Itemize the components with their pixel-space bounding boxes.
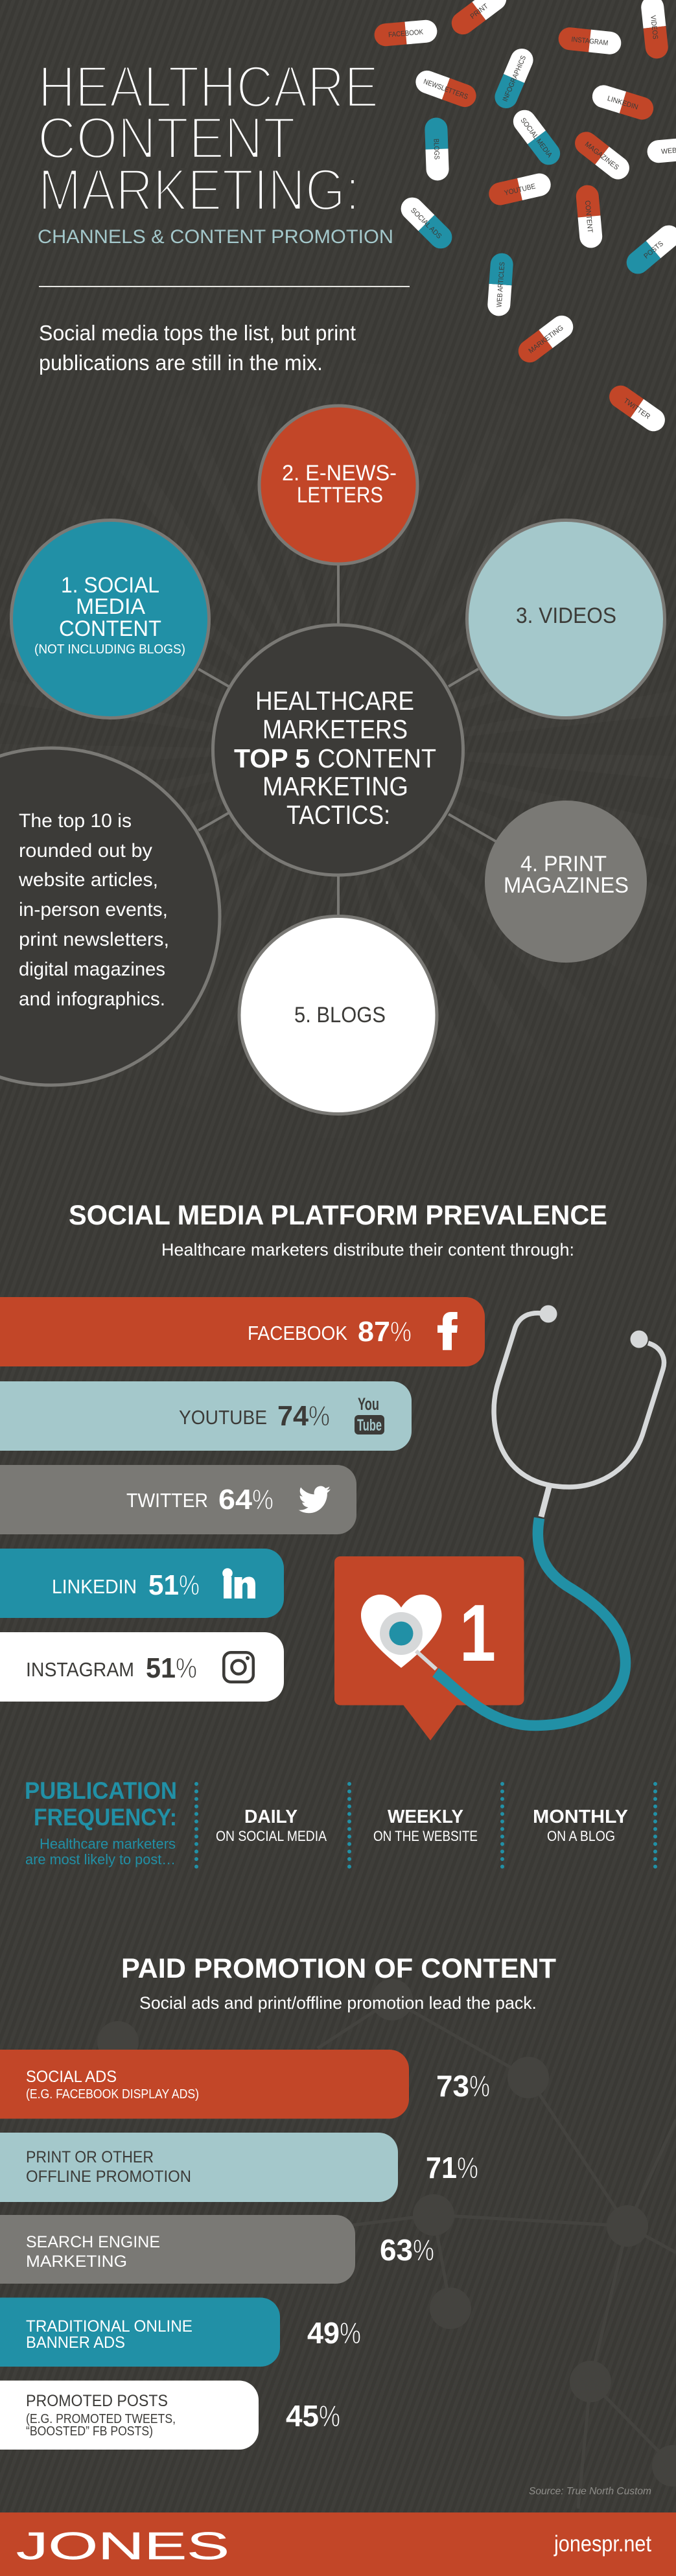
circle: e-newsletters — [259, 406, 417, 564]
frequency: monthly: MONTHLY — [533, 1807, 628, 1827]
circle: center hub: MARKETING — [262, 771, 408, 801]
circle: rest of top 10 — [0, 748, 220, 1085]
circle: rest of top 10: print newsletters, — [19, 929, 169, 950]
stethoscope — [380, 1306, 664, 1726]
pill: youtube — [487, 171, 553, 207]
bar: print or offline: OFFLINE PROMOTION — [26, 2168, 191, 2186]
pill: facebook: FACEBOOK — [388, 29, 424, 39]
pill: marketing: MARKETING — [527, 324, 565, 355]
circle: social media content: (NOT INCLUDING BLOGS) — [34, 642, 185, 657]
bar: search engine marketing — [0, 2215, 434, 2284]
pill: newsletters: NEWSLETTERS — [423, 78, 469, 101]
publication frequency heading — [25, 1777, 177, 1868]
bar: social ads — [0, 2050, 490, 2118]
title: HEALTHCARE — [38, 54, 379, 120]
publication frequency block — [25, 1777, 655, 1868]
bar: social ads: % — [469, 2069, 490, 2103]
bar: print or offline: 71 — [426, 2151, 457, 2184]
pill: social media — [509, 106, 565, 169]
like bubble — [334, 1556, 524, 1740]
pill: social media: SOCIAL MEDIA — [519, 117, 554, 159]
publication frequency heading: Healthcare marketers — [40, 1836, 176, 1852]
pill: instagram — [557, 27, 622, 55]
bar: promoted posts: (E.G. PROMOTED TWEETS, — [26, 2412, 176, 2426]
bar: twitter: TWITTER — [126, 1489, 208, 1512]
like bubble and stethoscope — [334, 1306, 664, 1740]
bar: social ads: (E.G. FACEBOOK DISPLAY ADS) — [26, 2087, 199, 2102]
circle: e-newsletters: 2. E-NEWS- — [282, 461, 397, 486]
pill: content: CONTENT — [583, 200, 594, 233]
bar: youtube: % — [309, 1400, 330, 1432]
circle: videos: 3. VIDEOS — [516, 603, 616, 628]
heading: paid promotion: PAID PROMOTION OF CONTENT — [121, 1953, 556, 1984]
pill: linkedin — [590, 82, 656, 123]
circle: print magazines: 4. PRINT — [520, 852, 607, 876]
icon: youtube: Tube — [357, 1416, 382, 1434]
pill: instagram: INSTAGRAM — [571, 36, 609, 47]
molecule background network — [97, 1979, 676, 2509]
pill: social ads: SOCIAL ADS — [409, 207, 443, 240]
circle: print magazines — [485, 801, 647, 963]
bar: print or offline — [0, 2133, 478, 2202]
bar: youtube — [0, 1381, 412, 1451]
pill: print — [447, 0, 511, 39]
pill: web articles: WEB ARTICLES — [496, 262, 506, 307]
circle: center hub — [213, 625, 463, 875]
frequency: weekly — [373, 1807, 478, 1844]
bar: instagram — [0, 1632, 284, 1702]
pill: twitter — [605, 381, 670, 436]
frequency: daily: DAILY — [244, 1807, 297, 1827]
bar: linkedin — [0, 1549, 284, 1618]
circle: rest of top 10: The top 10 is — [19, 810, 132, 832]
footer url: jonespr.net — [554, 2531, 651, 2557]
publication frequency heading: FREQUENCY: — [34, 1804, 177, 1831]
bar: banner ads: % — [340, 2316, 361, 2350]
spokes — [198, 564, 496, 916]
circle: rest of top 10: digital magazines — [19, 959, 165, 980]
bar: facebook: 87 — [358, 1316, 390, 1348]
circle: print magazines: MAGAZINES — [504, 873, 629, 898]
bar: linkedin: LINKEDIN — [52, 1575, 137, 1598]
pill: posts — [622, 220, 676, 279]
circle: rest of top 10: and infographics. — [19, 989, 165, 1010]
subheading: distribution: Healthcare marketers distribute their content through: — [161, 1240, 574, 1259]
bar: twitter: 64 — [218, 1484, 253, 1516]
bar: search engine marketing: MARKETING — [26, 2253, 127, 2271]
bar: facebook: % — [390, 1316, 412, 1348]
pill: newsletters — [412, 67, 480, 110]
bar: promoted posts: PROMOTED POSTS — [26, 2392, 168, 2410]
circle: social media content: 1. SOCIAL — [61, 573, 159, 598]
icon: twitter — [299, 1486, 331, 1513]
bar: banner ads — [0, 2297, 361, 2367]
icon: youtube — [355, 1394, 384, 1434]
bar: print or offline: % — [457, 2151, 478, 2184]
pill: magazines — [570, 127, 634, 184]
bar: promoted posts: “BOOSTED” FB POSTS) — [26, 2424, 153, 2439]
bar: twitter — [0, 1465, 356, 1534]
bar: social ads: SOCIAL ADS — [26, 2068, 117, 2086]
pill: print: PRINT — [469, 3, 490, 21]
frequency: daily: ON SOCIAL MEDIA — [216, 1828, 327, 1844]
pill: posts: POSTS — [642, 240, 665, 261]
pill: facebook — [373, 19, 438, 47]
pill: social ads — [396, 193, 457, 253]
hub and spoke diagram — [0, 406, 665, 1114]
circle: rest of top 10: in-person events, — [19, 899, 168, 920]
bar: facebook — [0, 1297, 485, 1366]
pill: web articles — [487, 252, 514, 317]
bar: search engine marketing: 63 — [380, 2233, 413, 2267]
bar: social ads: 73 — [436, 2069, 469, 2103]
pill: blogs — [425, 117, 449, 181]
circle: rest of top 10: rounded out by — [19, 840, 152, 861]
bar: instagram: % — [176, 1652, 197, 1684]
subheading: paid promotion: Social ads and print/offline promotion lead the pack. — [139, 1993, 537, 2013]
frequency: monthly — [533, 1807, 628, 1844]
title: CONTENT — [38, 106, 296, 171]
bar: search engine marketing: % — [413, 2233, 434, 2267]
bar: instagram: 51 — [146, 1652, 176, 1684]
pill: marketing — [514, 311, 577, 367]
title rule — [39, 286, 410, 287]
pill: infographics: INFOGRAPHICS — [502, 54, 528, 103]
bar: search engine marketing: SEARCH ENGINE — [26, 2233, 160, 2251]
frequency: daily — [216, 1807, 327, 1844]
pill: content — [575, 184, 603, 249]
pill: blogs: BLOGS — [432, 139, 441, 159]
heading: social media platform prevalence: SOCIAL MEDIA PLATFORM PREVALENCE — [69, 1200, 607, 1231]
frequency: weekly: ON THE WEBSITE — [373, 1828, 478, 1844]
circle: blogs: 5. BLOGS — [294, 1003, 386, 1027]
intro text — [39, 321, 356, 375]
circle: blogs — [239, 917, 437, 1114]
pill: videos: VIDEOS — [649, 15, 659, 40]
intro text: publications are still in the mix. — [39, 351, 323, 375]
icon: facebook — [437, 1312, 458, 1350]
circle: social media content: MEDIA — [76, 594, 145, 619]
bar: promoted posts: % — [319, 2399, 340, 2433]
bar: banner ads: BANNER ADS — [26, 2334, 125, 2352]
bar: promoted posts: 45 — [286, 2399, 319, 2433]
icon: linkedin — [222, 1568, 255, 1598]
circle: center hub: TOP 5 — [234, 744, 310, 773]
bar: youtube: 74 — [277, 1400, 309, 1432]
bar: banner ads: 49 — [307, 2316, 340, 2350]
pills — [373, 0, 676, 436]
circle: center hub: MARKETERS — [262, 714, 408, 744]
bar: instagram: INSTAGRAM — [26, 1658, 134, 1681]
circle: center hub: HEALTHCARE — [255, 686, 414, 716]
bar: print or offline: PRINT OR OTHER — [26, 2148, 154, 2166]
circle: e-newsletters: LETTERS — [297, 483, 383, 508]
logo: jones: JONES — [16, 2525, 229, 2568]
circle: social media content — [12, 520, 209, 718]
title: MARKETING: — [38, 158, 360, 223]
bar: twitter: % — [252, 1484, 274, 1516]
pill: youtube: YOUTUBE — [504, 183, 536, 197]
icon: youtube: You — [358, 1394, 379, 1414]
pill: magazines: MAGAZINES — [583, 141, 620, 172]
publication frequency heading: are most likely to post… — [25, 1851, 176, 1868]
circle: social media content: CONTENT — [59, 616, 161, 641]
bar: banner ads: TRADITIONAL ONLINE — [26, 2317, 192, 2336]
pill: videos — [640, 0, 669, 60]
like bubble: 1 — [460, 1589, 496, 1678]
footer — [0, 2512, 676, 2576]
bar: promoted posts — [0, 2380, 340, 2450]
title — [38, 54, 379, 223]
bar: linkedin: 51 — [148, 1569, 179, 1601]
pill: web — [646, 135, 676, 164]
bar: facebook: FACEBOOK — [248, 1322, 347, 1344]
pill: linkedin: LINKEDIN — [607, 95, 639, 111]
circle: videos — [467, 520, 665, 718]
pill: twitter: TWITTER — [622, 397, 651, 421]
icon: instagram — [224, 1652, 253, 1682]
circle: rest of top 10: website articles, — [18, 869, 158, 891]
source note: Source: True North Custom — [529, 2486, 651, 2497]
frequency: weekly: WEEKLY — [388, 1807, 463, 1827]
publication frequency heading: PUBLICATION — [25, 1777, 177, 1804]
bar: youtube: YOUTUBE — [179, 1406, 267, 1429]
pill: infographics — [491, 45, 537, 111]
circle: center hub: TACTICS: — [286, 800, 390, 830]
intro text: Social media tops the list, but print — [39, 321, 356, 345]
frequency: monthly: ON A BLOG — [547, 1828, 615, 1844]
bar: linkedin: % — [179, 1569, 200, 1601]
subtitle: CHANNELS & CONTENT PROMOTION — [38, 226, 393, 248]
circle: center hub: CONTENT — [318, 744, 436, 773]
